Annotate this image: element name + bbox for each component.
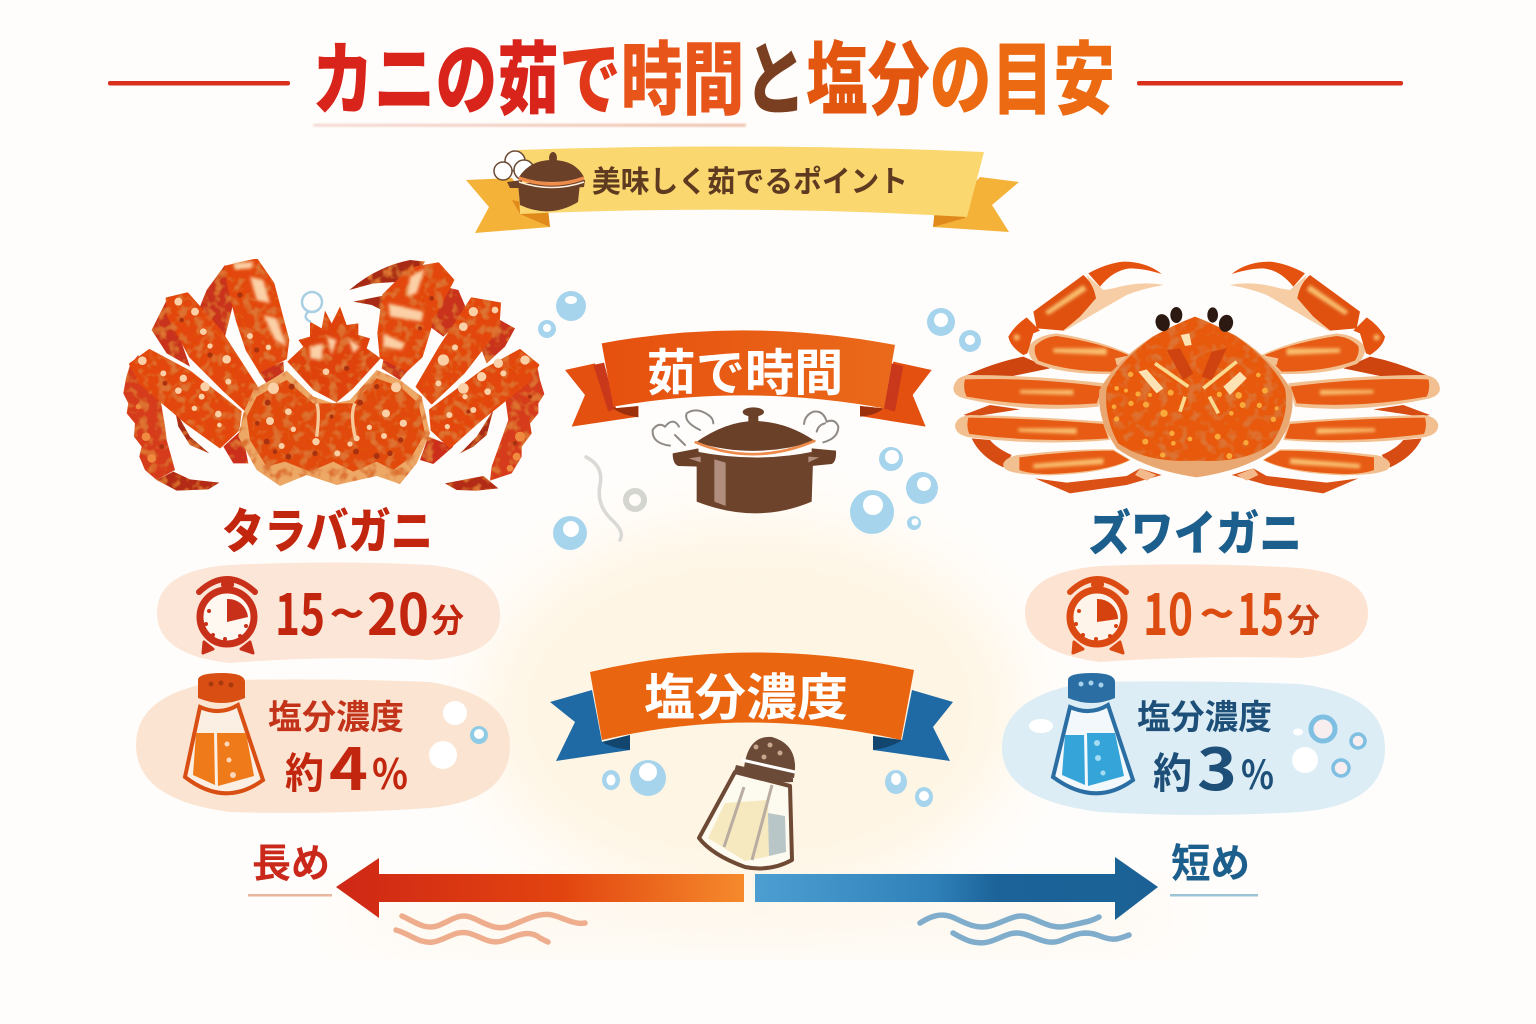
ribbon label: 塩分濃度 bbox=[644, 658, 848, 730]
bubbles around pot bbox=[538, 291, 981, 550]
time value bbox=[1143, 570, 1284, 652]
blue tails bbox=[550, 690, 630, 761]
panel: king crab salt bbox=[136, 673, 510, 813]
salt value: 3 bbox=[1197, 723, 1237, 807]
orange body bbox=[590, 652, 914, 740]
salt value bbox=[1153, 723, 1274, 807]
title text: カニの茹で時間と塩分の目安 bbox=[312, 16, 1115, 132]
king crab illustration bbox=[123, 259, 544, 491]
panel: snow crab salt bbox=[1002, 673, 1385, 815]
claw palm bbox=[1033, 275, 1096, 331]
head with spikes bbox=[287, 307, 381, 402]
carapace bbox=[1106, 317, 1286, 461]
label: 長め: 長め bbox=[252, 831, 330, 889]
salt label: 塩分濃度 bbox=[1137, 690, 1272, 739]
lower legs bbox=[123, 355, 175, 480]
label: 短め: 短め bbox=[1171, 831, 1250, 889]
icon: clock bbox=[199, 579, 255, 653]
spots bbox=[138, 298, 530, 456]
claw joint bbox=[1008, 317, 1040, 355]
title rule right bbox=[1137, 81, 1403, 86]
title bbox=[108, 16, 1403, 132]
pincer bbox=[1063, 275, 1164, 332]
unit: 分 bbox=[1287, 594, 1320, 642]
salt value: 約 bbox=[1153, 740, 1192, 801]
icon: orange salt shaker bbox=[185, 673, 263, 793]
small bubble near king crab bbox=[302, 292, 322, 322]
icon: clock bbox=[1070, 579, 1126, 653]
back legs dark bbox=[152, 265, 233, 367]
shell inner bbox=[247, 378, 425, 472]
salt value: % bbox=[1241, 743, 1274, 801]
time value: 15 bbox=[1237, 570, 1284, 652]
salt value: % bbox=[372, 741, 408, 802]
time value bbox=[275, 570, 429, 652]
time value: 10 bbox=[1143, 570, 1193, 652]
carapace outline bbox=[1099, 323, 1293, 477]
icon: blue salt shaker bbox=[1053, 673, 1133, 793]
salt value bbox=[285, 723, 408, 807]
unit: 分 bbox=[431, 594, 464, 642]
pale patches bbox=[233, 262, 425, 360]
ribbon tails bbox=[565, 363, 638, 427]
banner tails bbox=[466, 178, 550, 233]
ribbon label: 茹で時間 bbox=[647, 334, 843, 406]
bubbles bbox=[1029, 717, 1365, 776]
time value: 15 bbox=[275, 570, 325, 652]
banner text: 美味しく茹でるポイント bbox=[592, 157, 908, 201]
salt label: 塩分濃度 bbox=[268, 690, 404, 739]
salt value: 4 bbox=[329, 723, 368, 807]
salinity ribbon bbox=[550, 652, 953, 761]
arrow: long (left) bbox=[336, 858, 744, 918]
upper segments bbox=[225, 259, 288, 372]
panel: snow crab boil time bbox=[1025, 564, 1368, 662]
eyes bbox=[1153, 307, 1235, 334]
salt value: 約 bbox=[285, 740, 324, 801]
ribbon body bbox=[602, 330, 895, 408]
highlights bbox=[1014, 285, 1107, 468]
icon: center salt shaker bbox=[699, 737, 795, 868]
pincers bbox=[349, 260, 425, 290]
arrow: short (right) bbox=[755, 857, 1158, 920]
steam bbox=[653, 410, 838, 446]
ズワイガニ name: ズワイガニ bbox=[1088, 494, 1302, 564]
time value: ~ bbox=[329, 575, 365, 647]
white bubbles bbox=[429, 701, 488, 769]
right half mirrored bbox=[1229, 262, 1440, 493]
shell peach bbox=[238, 370, 430, 486]
boiling time ribbon and pot bbox=[565, 330, 932, 513]
banner body bbox=[517, 146, 984, 217]
panel: king crab boil time bbox=[157, 562, 500, 663]
walking legs bbox=[953, 375, 1105, 409]
snow crab illustration bbox=[953, 262, 1440, 493]
waves right bbox=[920, 915, 1129, 943]
time value: ~ bbox=[1199, 575, 1235, 647]
title underline bbox=[313, 124, 746, 126]
pot bbox=[653, 407, 838, 513]
title rule left bbox=[108, 81, 290, 86]
left half of legs and claw bbox=[953, 262, 1164, 493]
タラバガニ name: タラバガニ bbox=[222, 492, 433, 562]
yellow banner: 美味しく茹でるポイント bbox=[466, 146, 1019, 233]
waves left bbox=[396, 914, 585, 942]
icon: pot with steam bbox=[494, 151, 585, 211]
bubbles around shaker bbox=[602, 760, 933, 807]
time value: 20 bbox=[367, 570, 429, 652]
carapace markings bbox=[1155, 362, 1237, 413]
